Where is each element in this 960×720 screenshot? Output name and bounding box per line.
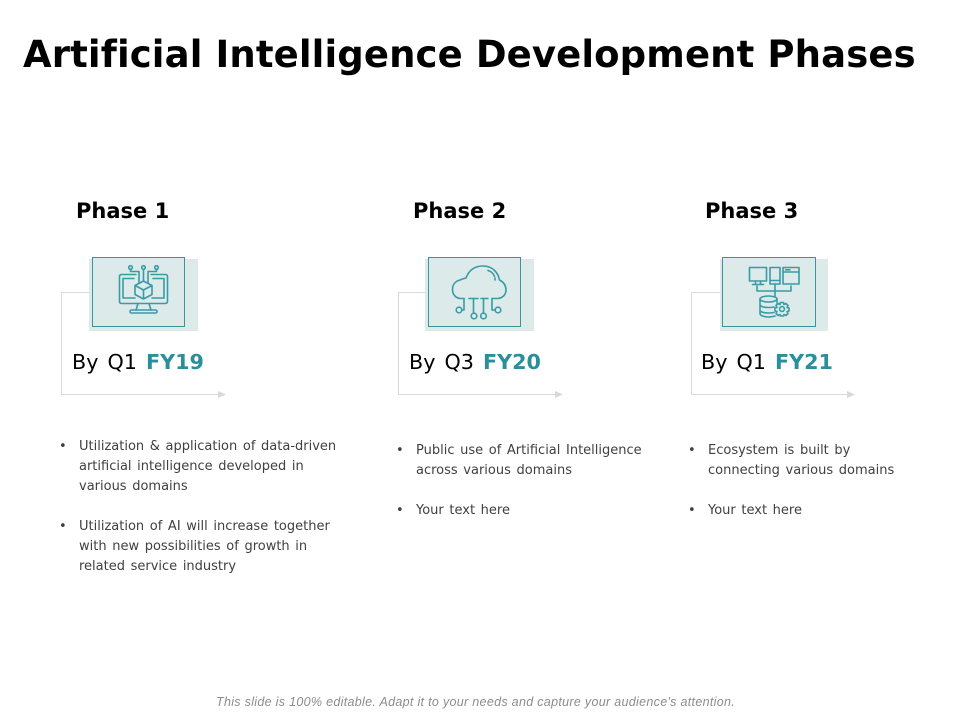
icon: devices and database — [750, 268, 799, 317]
text block: phase 1 bullets: related service industry — [79, 559, 236, 574]
label: by Q1 FY19: By Q1 FY19 — [72, 350, 204, 374]
text block: phase 2 bullets: across various domains — [416, 463, 572, 478]
text block: phase 3 bullets: Ecosystem is built by — [708, 443, 850, 458]
text block: phase 1 bullets: Utilization & application of data-driven — [79, 439, 336, 454]
text block: phase 2 bullets: Public use of Artificial Intelligence — [416, 443, 642, 458]
text block: phase 1 bullets: • — [59, 519, 67, 534]
connector arrow: phase 2 — [398, 292, 563, 398]
text block: phase 2 bullets: • — [396, 503, 404, 518]
connector arrow: phase 1 — [62, 292, 226, 398]
text block: phase 1 bullets: with new possibilities of growth in — [79, 539, 307, 554]
title: Artificial Intelligence Development Phases — [23, 33, 916, 76]
text block: phase 1 bullets: artificial intelligence developed in — [79, 459, 304, 474]
text block: phase 2 bullets — [396, 443, 642, 518]
connector arrow: phase 3 — [692, 292, 855, 398]
text block: phase 3 bullets: • — [688, 503, 696, 518]
icon: monitor with cube — [120, 266, 168, 313]
text block: phase 3 bullets: • — [688, 443, 696, 458]
footer note: This slide is 100% editable. Adapt it to your needs and capture your audience's attention. — [216, 695, 735, 709]
label: by Q1 FY21: By Q1 FY21 — [701, 350, 833, 374]
text block: phase 3 bullets: Your text here — [708, 503, 802, 518]
icon box: phase 3 — [720, 258, 828, 331]
text block: phase 3 bullets — [688, 443, 894, 518]
text block: phase 2 bullets: Your text here — [416, 503, 510, 518]
icon box: phase 2 — [425, 258, 534, 331]
text block: phase 1 bullets: • — [59, 439, 67, 454]
text block: phase 3 bullets: connecting various domains — [708, 463, 894, 478]
text block: phase 1 bullets — [59, 439, 336, 574]
text block: phase 1 bullets: Utilization of AI will increase together — [79, 519, 330, 534]
icon box: phase 1 — [89, 258, 198, 331]
heading: phase 1: Phase 1 — [76, 199, 169, 223]
label: by Q3 FY20: By Q3 FY20 — [409, 350, 541, 374]
heading: phase 2: Phase 2 — [413, 199, 506, 223]
icon: cloud network — [452, 266, 506, 319]
heading: phase 3: Phase 3 — [705, 199, 798, 223]
text block: phase 2 bullets: • — [396, 443, 404, 458]
text block: phase 1 bullets: various domains — [79, 479, 188, 494]
